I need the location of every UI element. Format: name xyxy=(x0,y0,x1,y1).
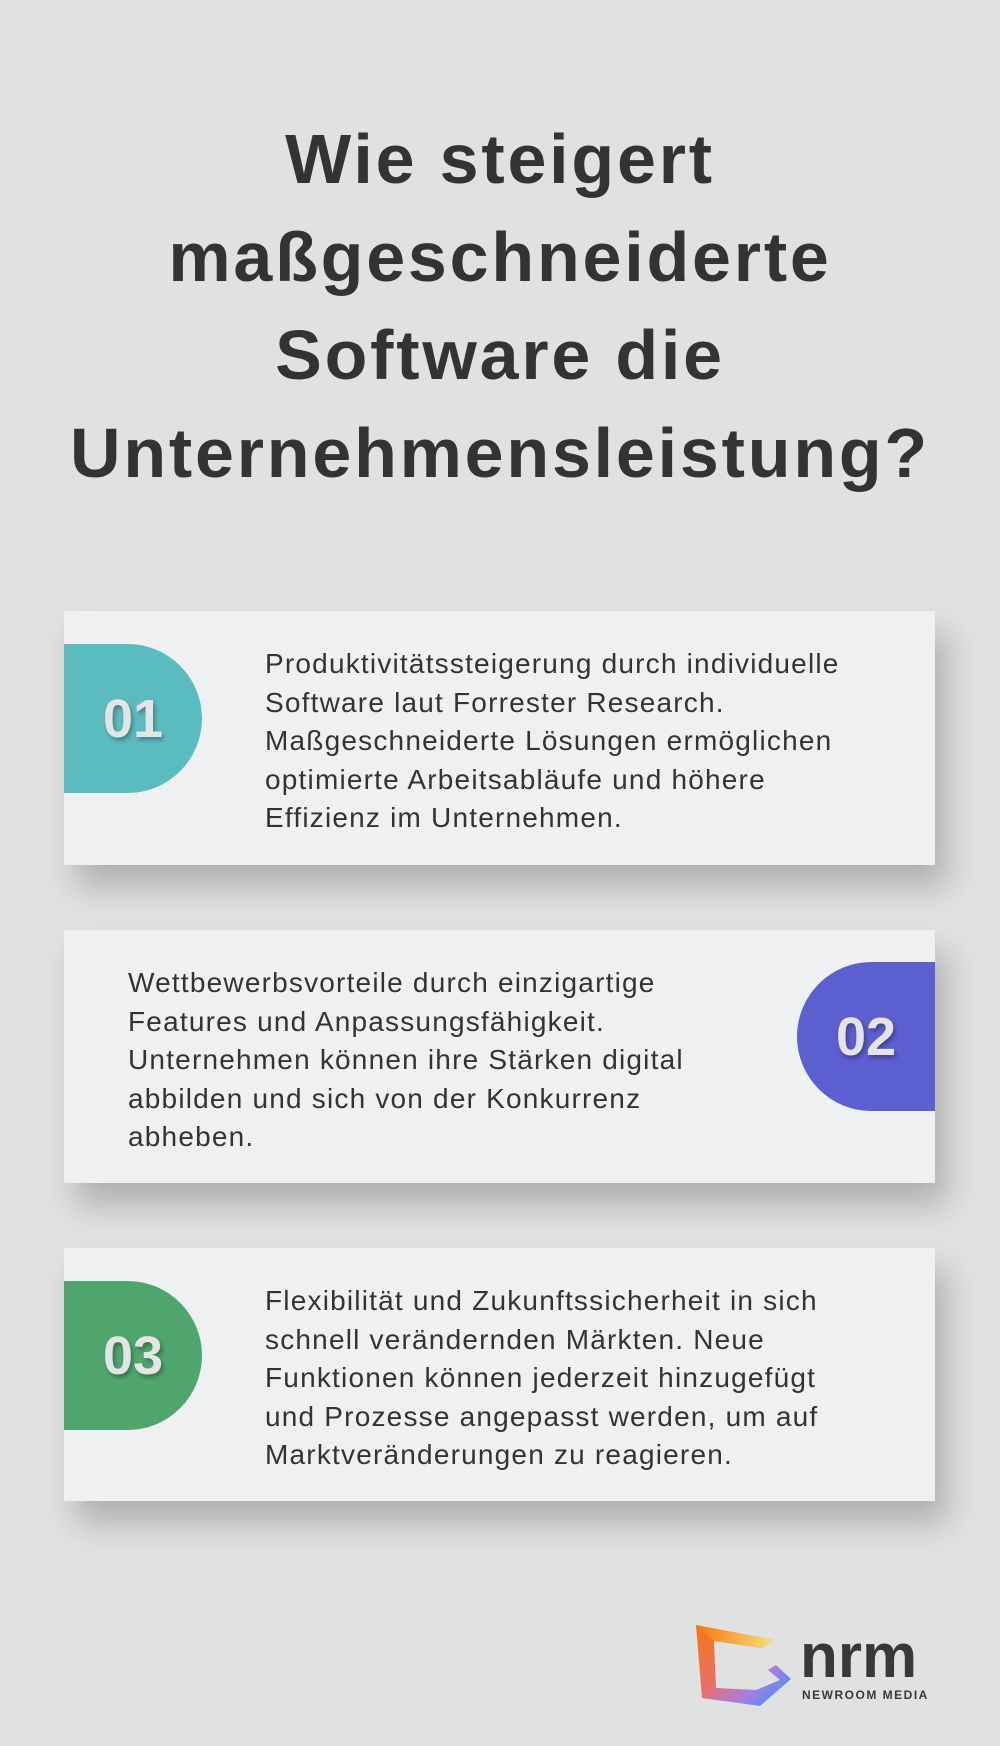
badge 03: 03 xyxy=(103,1326,163,1386)
text block 01: optimierte Arbeitsabläufe und höhere xyxy=(265,764,766,794)
badge 02 xyxy=(797,962,935,1111)
text block 03: und Prozesse angepasst werden, um auf xyxy=(265,1400,818,1432)
text block 03: schnell verändernden Märkten. Neue xyxy=(265,1324,765,1354)
text block 02: Unternehmen können ihre Stärken digital xyxy=(128,1044,684,1075)
title: Wie steigert xyxy=(285,120,715,198)
title: maßgeschneiderte xyxy=(168,218,832,296)
text block 03: Flexibilität und Zukunftssicherheit in sich xyxy=(265,1285,818,1316)
badge 03 xyxy=(64,1281,202,1430)
badge 01: 01 xyxy=(103,688,163,748)
panel: card 03 xyxy=(64,1248,935,1501)
text block 02: abheben. xyxy=(128,1121,254,1152)
panel: card 01 xyxy=(64,611,935,865)
logo: NEWROOM MEDIA xyxy=(802,1688,929,1702)
text block 02: abbilden und sich von der Konkurrenz xyxy=(128,1082,641,1114)
text block 01: Effizienz im Unternehmen. xyxy=(265,802,623,833)
title: Software die xyxy=(275,316,725,394)
badge 02: 02 xyxy=(836,1006,896,1066)
title: Unternehmensleistung? xyxy=(70,414,930,492)
text block 01: Produktivitätssteigerung durch individuelle xyxy=(265,648,840,679)
text block 02: Wettbewerbsvorteile durch einzigartige xyxy=(128,967,656,998)
text block 02: Features und Anpassungsfähigkeit. xyxy=(128,1006,605,1036)
logo xyxy=(696,1622,929,1706)
text block 01: Software laut Forrester Research. xyxy=(265,686,725,718)
text block 01 xyxy=(265,648,840,833)
logo wordmark: nrm xyxy=(800,1622,917,1691)
panel: card 02 xyxy=(64,930,935,1183)
title xyxy=(70,120,930,492)
icon: nrm logo mark xyxy=(696,1625,791,1706)
text block 03: Marktveränderungen zu reagieren. xyxy=(265,1439,733,1470)
text block 03 xyxy=(265,1285,818,1470)
text block 03: Funktionen können jederzeit hinzugefügt xyxy=(265,1362,816,1393)
badge 01 xyxy=(64,644,202,793)
text block 01: Maßgeschneiderte Lösungen ermöglichen xyxy=(265,725,832,756)
text block 02 xyxy=(128,967,684,1152)
